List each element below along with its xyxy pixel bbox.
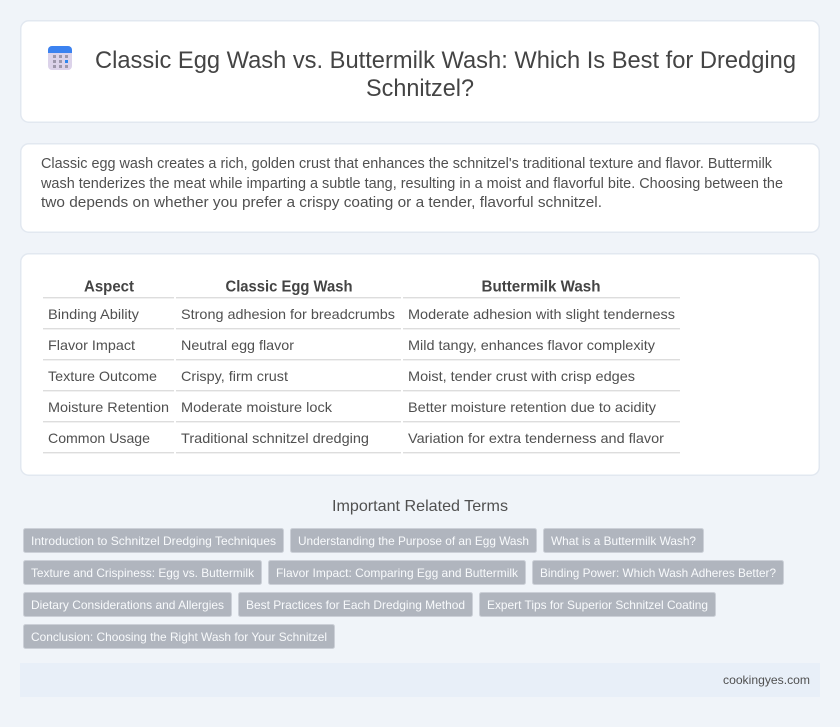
tag: Dietary Considerations and Allergies — [31, 598, 224, 612]
tag — [532, 560, 784, 584]
table row: flavor impact: Flavor Impact — [48, 337, 135, 353]
intro paragraph: wash tenderizes the meat while imparting a subtle tang, resulting in a moist and flavorful bite. Choosing between the — [40, 176, 783, 192]
table row: binding ability: Binding Ability — [48, 306, 139, 322]
heading: related terms: Important Related Terms — [332, 498, 508, 515]
tag — [238, 592, 472, 616]
panel: title header — [21, 21, 819, 122]
intro paragraph: Classic egg wash creates a rich, golden crust that enhances the schnitzel's traditional texture and flavor. Buttermilk — [41, 156, 773, 172]
tag — [24, 528, 284, 552]
icon: calendar — [48, 46, 72, 70]
tag — [268, 560, 526, 584]
tag: Flavor Impact: Comparing Egg and Buttermilk — [276, 566, 519, 580]
intro paragraph: two depends on whether you prefer a crispy coating or a tender, flavorful schnitzel. — [41, 195, 602, 211]
tag — [480, 592, 716, 616]
tag: Texture and Crispiness: Egg vs. Buttermilk — [31, 566, 255, 580]
tag — [24, 560, 262, 584]
panel: intro text — [21, 144, 819, 232]
tag — [290, 528, 536, 552]
tag: Binding Power: Which Wash Adheres Better? — [540, 566, 776, 580]
table row: binding ability — [48, 306, 675, 322]
table row: binding ability: Moderate adhesion with slight tenderness — [408, 306, 675, 322]
title — [95, 47, 796, 102]
table row: common usage: Variation for extra tenderness and flavor — [408, 430, 664, 446]
table row: moisture retention — [48, 399, 656, 415]
table header row: Classic Egg Wash — [226, 278, 352, 296]
table header row: Buttermilk Wash — [482, 278, 600, 296]
table row: common usage: Common Usage — [48, 430, 150, 446]
tag — [24, 592, 232, 616]
tag: Introduction to Schnitzel Dredging Techniques — [31, 534, 276, 548]
title: Classic Egg Wash vs. Buttermilk Wash: Which Is Best for Dredging — [95, 47, 796, 74]
tag: Expert Tips for Superior Schnitzel Coating — [487, 598, 708, 612]
table row: flavor impact: Mild tangy, enhances flavor complexity — [408, 337, 655, 353]
footer — [20, 663, 820, 697]
table row: common usage — [48, 430, 664, 446]
footer source: cookingyes.com — [723, 673, 810, 687]
tag: Understanding the Purpose of an Egg Wash — [298, 534, 529, 548]
title: Schnitzel? — [366, 75, 474, 102]
table row: texture outcome: Moist, tender crust with crisp edges — [408, 368, 635, 384]
panel: related term tags — [24, 528, 784, 648]
table row: texture outcome — [48, 368, 635, 384]
table row: flavor impact: Neutral egg flavor — [181, 337, 294, 353]
panel: comparison table — [21, 254, 819, 475]
tag: Best Practices for Each Dredging Method — [246, 598, 465, 612]
table header row — [84, 278, 600, 296]
table row: common usage: Traditional schnitzel dredging — [181, 430, 369, 446]
tag: What is a Buttermilk Wash? — [551, 534, 696, 548]
tag — [544, 528, 704, 552]
table row: moisture retention: Moisture Retention — [48, 399, 169, 415]
tag — [24, 624, 334, 648]
table row: texture outcome: Crispy, firm crust — [181, 368, 288, 384]
table row: flavor impact — [48, 337, 655, 353]
tag: Conclusion: Choosing the Right Wash for Your Schnitzel — [31, 630, 327, 644]
intro paragraph — [40, 156, 783, 211]
table row: binding ability: Strong adhesion for breadcrumbs — [181, 306, 395, 322]
table header row: Aspect — [84, 278, 135, 296]
table row: moisture retention: Better moisture retention due to acidity — [408, 399, 656, 415]
table row: texture outcome: Texture Outcome — [48, 368, 157, 384]
table row: moisture retention: Moderate moisture lock — [181, 399, 333, 415]
